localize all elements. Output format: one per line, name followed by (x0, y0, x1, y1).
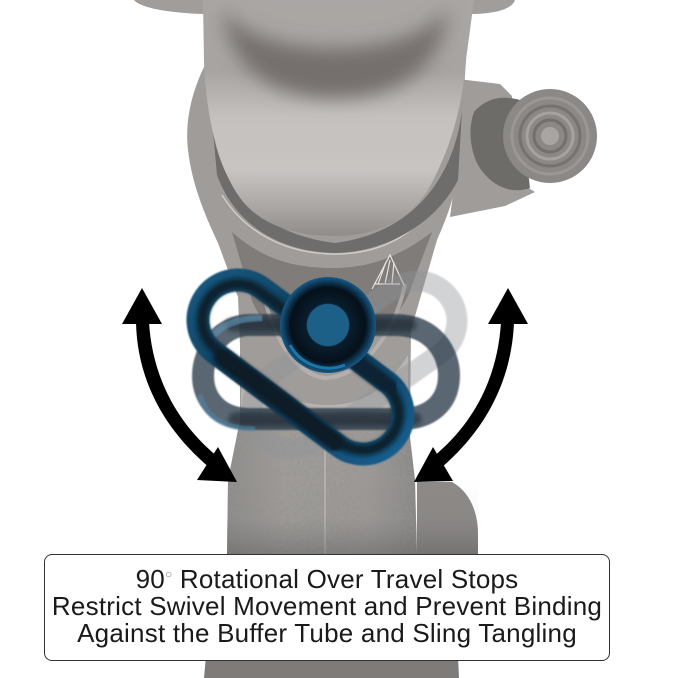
arrow: left double-headed (122, 288, 237, 482)
icon: side button stem and arm (450, 79, 535, 217)
receiver neck and top flange (134, 0, 515, 236)
collar ring (212, 110, 462, 253)
icon: side push button (503, 89, 597, 183)
blue sling swivel loop (198, 280, 403, 454)
ghost swivel: rotated opposite way (252, 281, 457, 449)
ghost swivel: horizontal position (200, 318, 449, 429)
pistol grip (204, 420, 478, 678)
callout text: Restrict Swivel Movement and Prevent Binding (52, 591, 602, 621)
mount plate (187, 60, 466, 435)
product illustration (122, 0, 597, 678)
arrow: right double-headed (414, 288, 528, 482)
callout text (52, 564, 602, 648)
callout text: Against the Buffer Tube and Sling Tangling (77, 618, 577, 648)
swivel stud knob (280, 277, 376, 373)
callout box (44, 554, 610, 661)
logo mark (372, 255, 404, 289)
callout text: 90○ Rotational Over Travel Stops (136, 564, 518, 594)
